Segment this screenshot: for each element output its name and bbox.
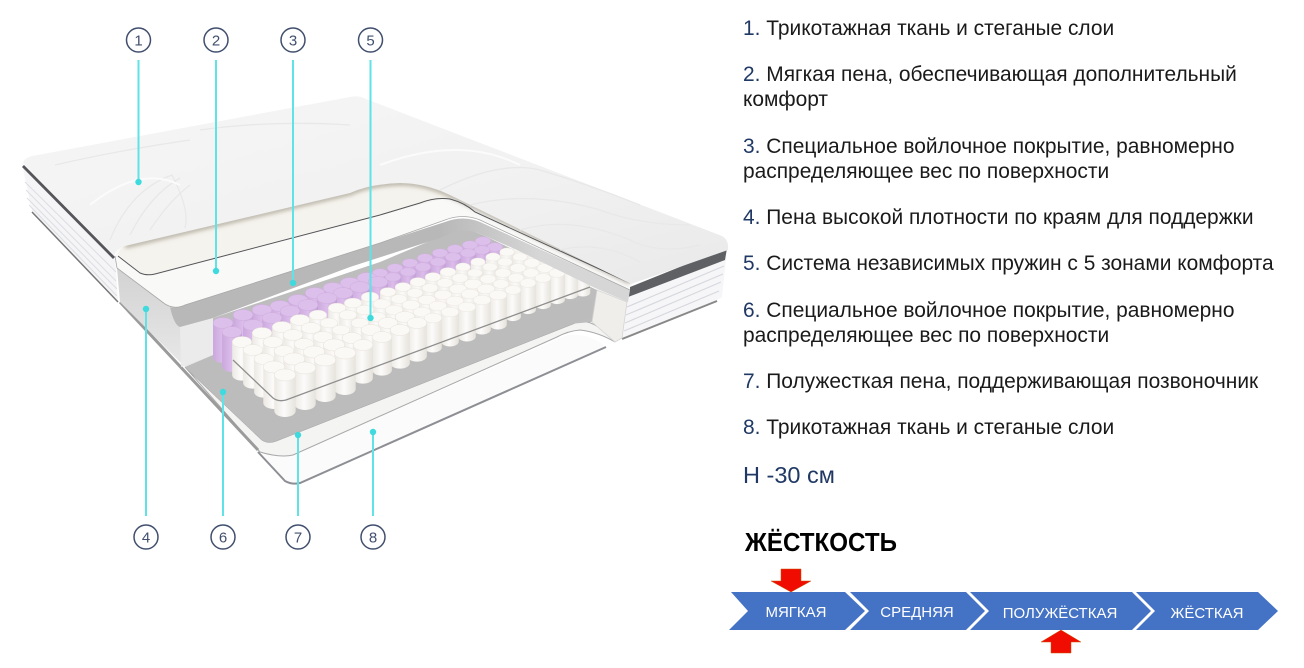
red arrow: up, other side [1041, 630, 1081, 653]
right foam block [592, 290, 627, 342]
marker 4 [134, 306, 158, 549]
item 2: комфорт [743, 88, 828, 111]
layer 6: felt floor [185, 300, 592, 442]
marker 5 [358, 28, 382, 321]
marker 4: 4 [142, 530, 150, 546]
red arrow: down, soft side [771, 569, 811, 592]
right side panel [622, 248, 727, 339]
chevron: soft [729, 592, 865, 630]
legend text list [743, 17, 1274, 488]
item 7: 7. Полужесткая пена, поддерживающая позвоночник [743, 370, 1259, 393]
white spring rows [232, 244, 590, 417]
leader lines and numbered markers [126, 28, 385, 549]
left side panel [22, 163, 118, 302]
firmness scale [729, 592, 1278, 630]
item 8: 8. Трикотажная ткань и стеганые слои [743, 416, 1114, 439]
item 1: 1. Трикотажная ткань и стеганые слои [743, 17, 1114, 40]
layer 7: semi-rigid foam [185, 322, 615, 456]
mattress cutaway illustration [22, 96, 728, 484]
marker 8: 8 [369, 530, 377, 546]
item 5: 5. Система независимых пружин с 5 зонами комфорта [743, 252, 1274, 275]
marker 7 [286, 432, 310, 549]
chevron: semi-firm [970, 592, 1151, 630]
spring wire [233, 287, 590, 401]
purple spring rows [213, 237, 503, 372]
marker 3 [281, 28, 305, 286]
marker 7: 7 [294, 530, 302, 546]
chevron: firm: ЖЁСТКАЯ [1171, 605, 1243, 622]
marker 8 [361, 429, 385, 549]
top quilted surface [23, 96, 728, 284]
layer 4: high density foam edge [117, 268, 213, 367]
item 4: 4. Пена высокой плотности по краям для поддержки [743, 206, 1254, 229]
edge strip [120, 302, 258, 450]
marker 2 [204, 28, 228, 274]
layer 2: soft foam [115, 183, 630, 307]
item 6: 6. Специальное войлочное покрытие, равномерно [743, 299, 1234, 322]
item 3: 3. Специальное войлочное покрытие, равномерно [743, 135, 1234, 158]
marker 3: 3 [289, 32, 297, 50]
layer 8: bottom quilted fabric [255, 335, 606, 484]
chevron: medium [850, 592, 985, 630]
marker 1: 1 [134, 32, 143, 50]
chevron: medium: СРЕДНЯЯ [880, 604, 954, 621]
marker 6 [211, 389, 235, 549]
chevron: soft: МЯГКАЯ [765, 604, 827, 621]
marker 5: 5 [366, 32, 375, 50]
chevron: semi-firm: ПОЛУЖЁСТКАЯ [1003, 605, 1117, 622]
height note: H -30 см [743, 462, 835, 488]
marker 2: 2 [212, 32, 220, 50]
marker 1 [126, 28, 150, 185]
item 6: распределяющее вес по поверхности [743, 324, 1109, 347]
cavity back wall [213, 227, 597, 355]
firmness heading: ЖЁСТКОСТЬ [744, 527, 897, 557]
chevron: firm [1136, 592, 1278, 630]
pocket springs [213, 237, 590, 417]
item 2: 2. Мягкая пена, обеспечивающая дополнительный [743, 63, 1237, 86]
item 3: распределяющее вес по поверхности [743, 160, 1109, 183]
marker 6: 6 [219, 530, 227, 546]
layer 3: felt cover [170, 218, 630, 327]
